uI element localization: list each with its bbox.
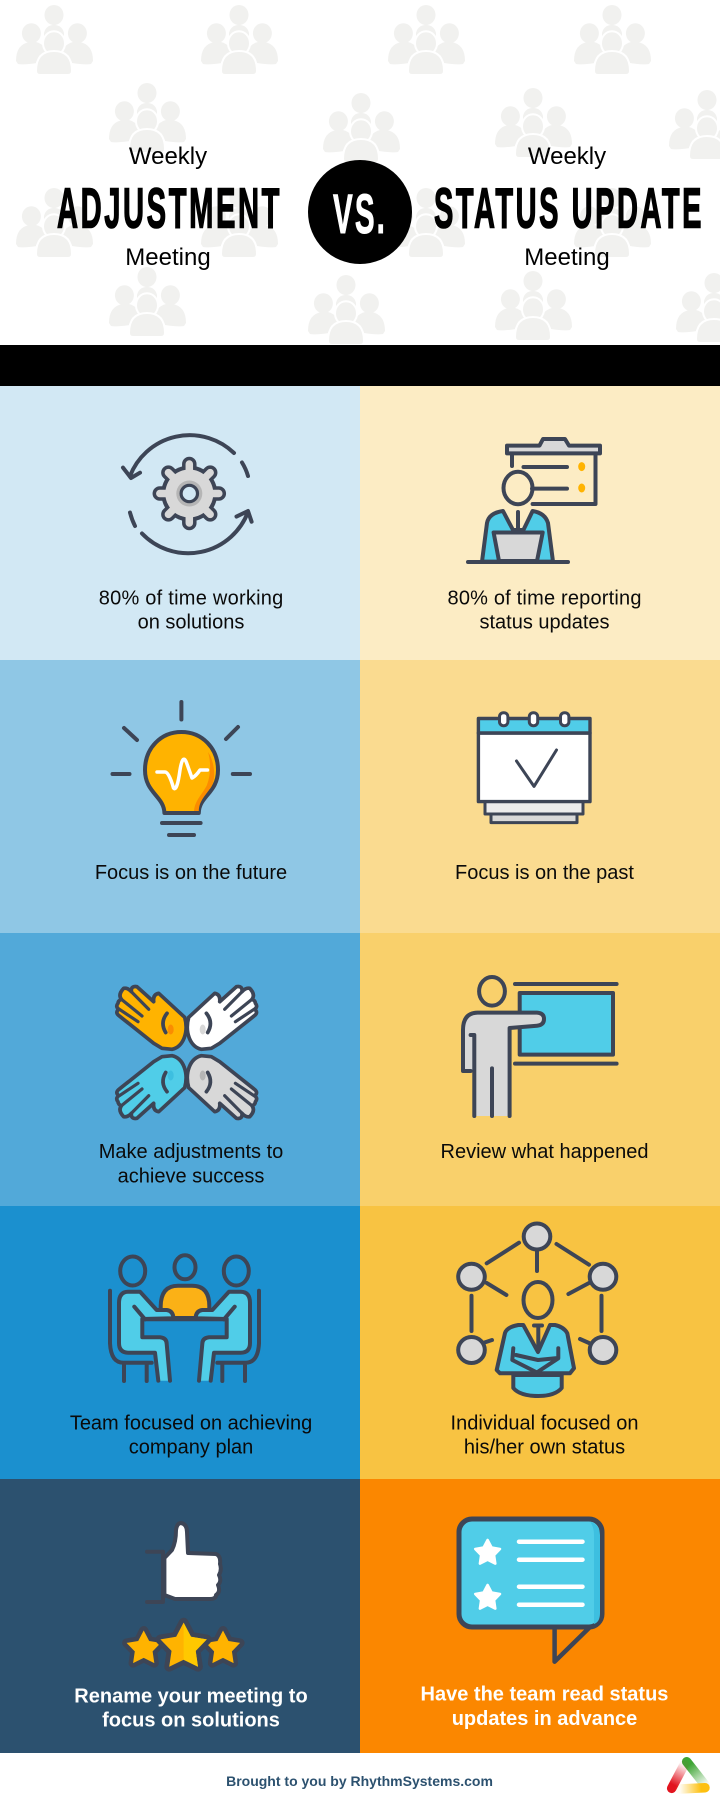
panel: individual focused on his/her own status — [360, 1206, 720, 1479]
label: Make adjustments to — [99, 1141, 283, 1163]
label: Review what happened — [441, 1141, 648, 1163]
panel: review what happened — [360, 933, 720, 1206]
title: weekly adjustment meeting — [57, 143, 282, 271]
vs badge: VS. — [333, 182, 387, 245]
icon: presenter at laptop with board — [468, 439, 600, 562]
title: weekly adjustment meeting: Weekly — [129, 143, 207, 170]
icon: team around table — [110, 1255, 259, 1381]
label: 80% of time reporting — [448, 588, 642, 610]
panel: rename your meeting — [0, 1479, 360, 1753]
label: Focus is on the past — [455, 862, 634, 884]
title: weekly adjustment meeting: ADJUSTMENT — [57, 176, 282, 240]
logo: rhythm systems triangle — [672, 1762, 705, 1789]
label: Individual focused on — [451, 1412, 638, 1434]
panel: 80% of time reporting status updates — [360, 386, 720, 660]
label: his/her own status — [464, 1436, 625, 1458]
panel: focus is on the future — [0, 660, 360, 933]
label: Rename your meeting to — [74, 1686, 308, 1708]
icon: speech bubble with starred list — [459, 1519, 602, 1662]
label: Team focused on achieving — [70, 1412, 312, 1434]
icon: networked individual — [458, 1224, 616, 1396]
title: weekly status update meeting: Weekly — [528, 143, 606, 170]
icon: presenter pointing at board — [463, 977, 617, 1116]
label: updates in advance — [452, 1708, 637, 1730]
label: Focus is on the future — [95, 862, 287, 884]
panel: focus is on the past — [360, 660, 720, 933]
panel: make adjustments to achieve success — [0, 933, 360, 1206]
panel: 80% of time working on solutions — [0, 386, 360, 660]
panel: team focused on achieving company plan — [0, 1206, 360, 1479]
label: 80% of time working — [99, 588, 283, 610]
icon: calendar with check — [478, 713, 590, 823]
panel: have the team read status updates — [360, 1479, 720, 1753]
black band — [0, 345, 720, 386]
vs badge — [308, 160, 412, 264]
title: weekly status update meeting — [434, 143, 704, 271]
label: achieve success — [118, 1165, 264, 1187]
title: weekly status update meeting: Meeting — [524, 244, 610, 271]
label: company plan — [129, 1436, 253, 1458]
icon: three stars — [127, 1623, 240, 1667]
label: on solutions — [138, 612, 244, 634]
icon: light bulb — [112, 702, 250, 835]
label: Have the team read status — [421, 1684, 668, 1706]
footer credit: Brought to you by RhythmSystems.com — [226, 1773, 493, 1789]
icon: gear with cycle arrows — [123, 435, 252, 553]
label: focus on solutions — [102, 1710, 280, 1732]
label: status updates — [479, 612, 610, 634]
title: weekly adjustment meeting: Meeting — [125, 244, 211, 271]
icon: four hands — [117, 987, 257, 1118]
background people pattern — [16, 5, 720, 345]
icon: thumbs up — [147, 1523, 221, 1602]
